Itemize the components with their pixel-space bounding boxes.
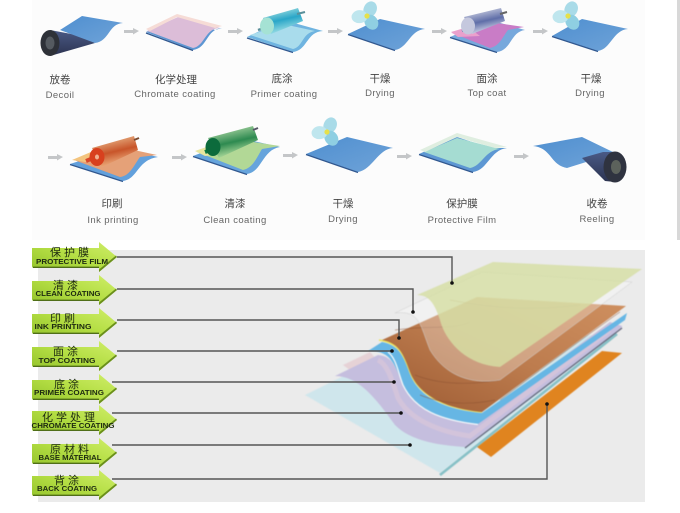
label: primer coating: 底涂 [54,377,82,391]
label: back coating [32,470,117,500]
step labels: 底涂 [272,72,293,85]
step labels: Top coat [467,88,507,99]
step labels: 化学处理 [155,73,197,86]
label: clean coating: 清漆 [53,279,81,292]
process background [32,0,645,240]
step: protective film [419,133,507,172]
layered sheet diagram [305,262,642,475]
process row 1 [40,0,628,182]
label: top coating [32,341,117,371]
step: drying [348,0,425,51]
step labels: 放卷 [50,73,71,86]
step labels: Drying [575,88,605,99]
step labels: Reeling [579,214,615,225]
layer: protective film [417,262,642,367]
step labels: 保护膜 [446,197,478,210]
label: protective film [32,242,117,272]
label: chromate coating: CHROMATE COATING [32,423,115,430]
label: top coating: 面涂 [53,344,81,358]
layer: chromate coating [335,322,622,448]
leader lines [112,257,549,479]
step: chromate coating [146,14,222,50]
layer: ink printing [382,297,626,412]
arrow [48,154,63,160]
step labels: Protective Film [428,215,496,226]
label: primer coating: PRIMER COATING [34,390,105,397]
arrow [397,153,412,160]
label: top coating: TOP COATING [38,358,96,365]
label: chromate coating [32,405,117,435]
arrow [283,152,298,158]
step: primer coating [247,8,323,52]
arrow [124,28,139,34]
step labels: Chromate coating [134,89,216,100]
label: back coating: BACK COATING [37,486,98,493]
layer: pink film [343,352,400,385]
panel: layer structure background [38,250,645,502]
step: drying [306,115,393,172]
label: clean coating [32,275,117,305]
arrow [172,154,187,160]
layer: clean coating [395,272,632,381]
right edge strip [677,0,680,240]
label: base material: BASE MATERIAL [38,455,102,462]
layer: base material [305,332,617,475]
step labels: 干燥 [332,198,354,210]
label: protective film: PROTECTIVE FILM [36,259,108,266]
layer: primer coating [368,313,627,424]
label: primer coating [32,374,117,404]
arrow [533,28,548,34]
arrow [328,28,343,34]
step labels: 收卷 [586,197,608,210]
label: base material [32,438,117,468]
arrow [514,153,529,160]
label: ink printing: INK PRINTING [34,324,92,331]
layer: back coating [477,351,622,457]
step labels: Drying [328,214,358,225]
label: back coating: 背涂 [54,473,82,487]
step labels: 干燥 [370,73,391,85]
arrow [228,28,243,34]
label: chromate coating: 化学处理 [42,410,98,424]
step labels: Ink printing [87,215,139,226]
step labels: Decoil [46,90,74,101]
step labels: 印刷 [102,197,122,210]
step labels: Clean coating [203,215,267,226]
label: ink printing [32,308,117,338]
step: top coat [450,8,525,52]
step labels: 面涂 [476,72,498,85]
step labels: Primer coating [251,89,317,100]
step labels [46,72,615,226]
step labels: 干燥 [580,73,602,85]
step: drying [552,0,628,52]
step: decoil [40,16,123,56]
step labels: 清漆 [224,197,246,210]
arrow [432,28,447,34]
step labels: Drying [365,88,395,99]
step: clean coating [193,126,280,174]
step: ink printing [70,136,158,182]
label: ink printing: 印刷 [50,312,78,325]
layer: top coating [379,340,482,412]
step: reeling [533,137,626,182]
label: protective film: 保护膜 [50,245,92,259]
label: base material: 原材料 [50,442,92,456]
label: clean coating: CLEAN COATING [36,291,101,298]
